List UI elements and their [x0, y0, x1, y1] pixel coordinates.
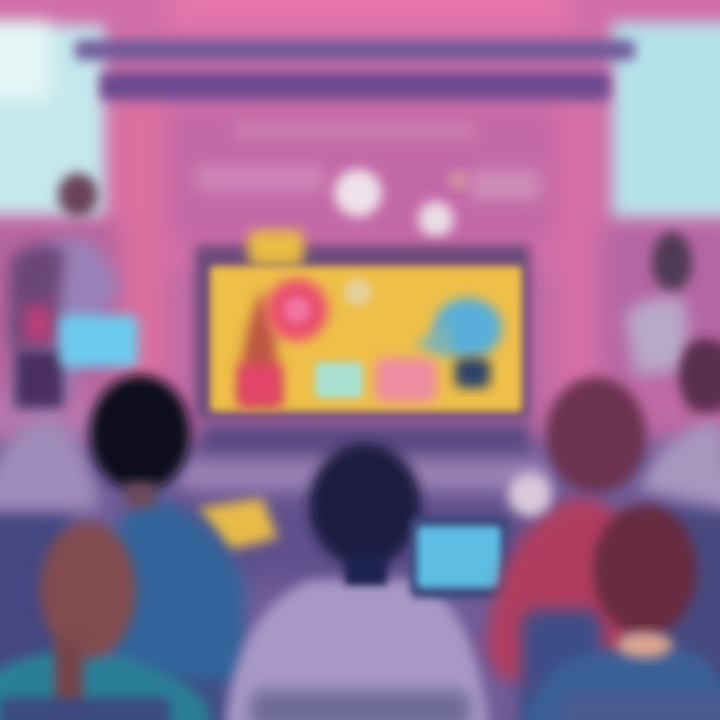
- right window: [612, 22, 720, 217]
- audience floor backdrop: [0, 400, 720, 720]
- audience person right with maroon hair: [485, 377, 650, 680]
- audience person red hair: [0, 522, 215, 720]
- title: [75, 40, 635, 100]
- yellow card on desk: [198, 498, 278, 550]
- subtitle text block: [195, 125, 540, 200]
- chart: red circle and figure: [238, 279, 328, 406]
- presenter right: [625, 232, 720, 410]
- front seat bottom: [0, 696, 720, 720]
- audience back left: [0, 420, 100, 510]
- presenter left: [10, 173, 138, 410]
- audience person front right: [520, 504, 720, 720]
- icon: teal card: [315, 362, 363, 398]
- stage desk: [180, 424, 550, 490]
- audience back right: [640, 340, 720, 510]
- decorative circles on wall: [334, 169, 467, 237]
- icon: small badge: [344, 278, 372, 306]
- screen panel: [195, 230, 530, 420]
- audience seats: [0, 510, 720, 720]
- icon: megaphone blue: [415, 298, 502, 388]
- audience person centre: [225, 443, 490, 720]
- audience person dark hair blue shirt: [90, 375, 245, 680]
- icon: pink card: [375, 358, 437, 402]
- icon: tablet: [60, 315, 138, 367]
- laptop audience: [410, 516, 508, 598]
- left window: [0, 20, 105, 215]
